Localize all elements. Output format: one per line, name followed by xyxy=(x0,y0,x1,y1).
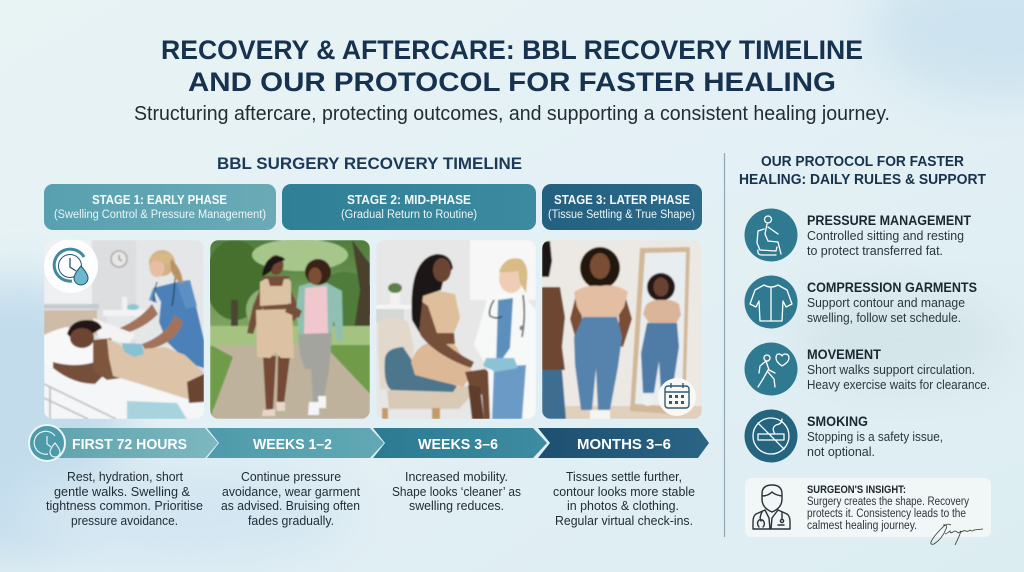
protocol: smoking xyxy=(744,410,943,462)
heading: protocol xyxy=(739,154,986,188)
photo: woman at mirror xyxy=(542,240,702,419)
text: first 72 hours description: Rest, hydration, short xyxy=(67,469,183,484)
text: months 3-6 description: Regular virtual check-ins. xyxy=(555,513,693,528)
title: RECOVERY & AFTERCARE: BBL RECOVERY TIMELINE xyxy=(161,35,863,65)
protocol: movement: Heavy exercise waits for clearance. xyxy=(807,377,990,392)
text: months 3-6 description xyxy=(553,469,695,528)
stage 1 header: (Swelling Control & Pressure Management) xyxy=(54,209,266,221)
text: weeks 1-2 description xyxy=(221,469,360,528)
protocol: pressure management xyxy=(744,208,972,262)
protocol: movement: Short walks support circulation. xyxy=(807,362,975,377)
protocol: pressure management: Controlled sitting and resting xyxy=(807,228,964,243)
timeline arrow: weeks 1-2: WEEKS 1–2 xyxy=(253,436,332,453)
protocol: movement xyxy=(744,342,990,396)
subtitle: Structuring aftercare, protecting outcomes, and supporting a consistent healing journey. xyxy=(134,102,890,125)
stage 3 header: STAGE 3: LATER PHASE xyxy=(554,192,690,207)
stage 2 header: (Gradual Return to Routine) xyxy=(341,209,477,221)
text: weeks 3-6 description: swelling reduces. xyxy=(409,498,504,513)
protocol: compression garments xyxy=(744,276,977,328)
stage 2 header: STAGE 2: MID-PHASE xyxy=(347,192,471,207)
icon: no smoking xyxy=(744,410,798,462)
text: first 72 hours description xyxy=(46,469,203,528)
callout: surgeon's insight: Surgery creates the shape. Recovery xyxy=(807,496,969,508)
timeline arrow: months 3-6 xyxy=(538,428,709,458)
timeline arrow: weeks 3-6: WEEKS 3–6 xyxy=(418,436,498,453)
photo: patient consulting doctor xyxy=(376,240,536,419)
timeline arrow: weeks 3-6 xyxy=(373,428,547,458)
timeline arrow: weeks 1-2 xyxy=(207,428,384,458)
text: months 3-6 description: Tissues settle further, xyxy=(566,469,682,484)
protocol: pressure management: to protect transferred fat. xyxy=(807,243,943,258)
text: weeks 1-2 description: Continue pressure xyxy=(241,469,341,484)
timeline arrow: first 72 hours xyxy=(29,425,218,461)
stage 1 header xyxy=(44,184,276,230)
icon: clock and drop badge xyxy=(29,425,65,461)
text: months 3-6 description: contour looks more stable xyxy=(553,484,695,499)
text: weeks 1-2 description: as advised. Bruising often xyxy=(221,498,360,513)
callout: surgeon's insight xyxy=(745,478,991,545)
text: weeks 3-6 description xyxy=(392,469,521,513)
text: weeks 1-2 description: avoidance, wear garment xyxy=(222,484,360,499)
stage 1 header: STAGE 1: EARLY PHASE xyxy=(92,192,227,207)
protocol: smoking: not optional. xyxy=(807,444,875,459)
photo: two women walking in park xyxy=(205,239,375,419)
stage 3 header: (Tissue Settling & True Shape) xyxy=(548,209,695,221)
protocol: compression garments: swelling, follow set schedule. xyxy=(807,310,961,325)
callout: surgeon's insight: SURGEON'S INSIGHT: xyxy=(807,484,906,496)
text: weeks 1-2 description: fades gradually. xyxy=(248,513,334,528)
stage 2 header xyxy=(282,184,536,230)
icon: walking figure with heart xyxy=(744,342,798,396)
signature xyxy=(931,524,983,545)
protocol: compression garments: Support contour and manage xyxy=(807,295,965,310)
title: AND OUR PROTOCOL FOR FASTER HEALING xyxy=(188,67,836,97)
title xyxy=(161,35,863,97)
callout: surgeon's insight: calmest healing journey. xyxy=(807,520,917,532)
timeline arrow: first 72 hours: FIRST 72 HOURS xyxy=(72,436,187,453)
text: weeks 3-6 description: Shape looks ‘cleaner’ as xyxy=(392,484,521,499)
text: first 72 hours description: tightness common. Prioritise xyxy=(46,498,203,513)
protocol: smoking: Stopping is a safety issue, xyxy=(807,429,943,444)
icon: seated figure xyxy=(744,208,798,262)
heading: protocol: HEALING: DAILY RULES & SUPPORT xyxy=(739,172,986,188)
icon: doctor xyxy=(753,485,790,529)
photo: nurse tending patient on bed xyxy=(44,239,204,419)
protocol: movement: MOVEMENT xyxy=(807,347,882,362)
icon: clock and water drop xyxy=(44,239,98,293)
callout: surgeon's insight: protects it. Consistency leads to the xyxy=(807,508,966,520)
stage 3 header xyxy=(542,184,702,230)
text: months 3-6 description: in photos & clothing. xyxy=(567,498,679,513)
protocol: pressure management: PRESSURE MANAGEMENT xyxy=(807,213,972,228)
text: first 72 hours description: gentle walks. Swelling & xyxy=(54,484,190,499)
text: first 72 hours description: pressure avoidance. xyxy=(71,513,178,528)
heading: recovery timeline: BBL SURGERY RECOVERY TIMELINE xyxy=(217,154,522,173)
text: weeks 3-6 description: Increased mobility. xyxy=(405,469,508,484)
protocol: smoking: SMOKING xyxy=(807,414,868,429)
protocol: compression garments: COMPRESSION GARMENTS xyxy=(807,280,977,295)
icon: calendar xyxy=(658,378,696,416)
icon: garment xyxy=(744,276,798,328)
heading: protocol: OUR PROTOCOL FOR FASTER xyxy=(761,154,964,170)
timeline arrow: months 3-6: MONTHS 3–6 xyxy=(577,436,671,453)
